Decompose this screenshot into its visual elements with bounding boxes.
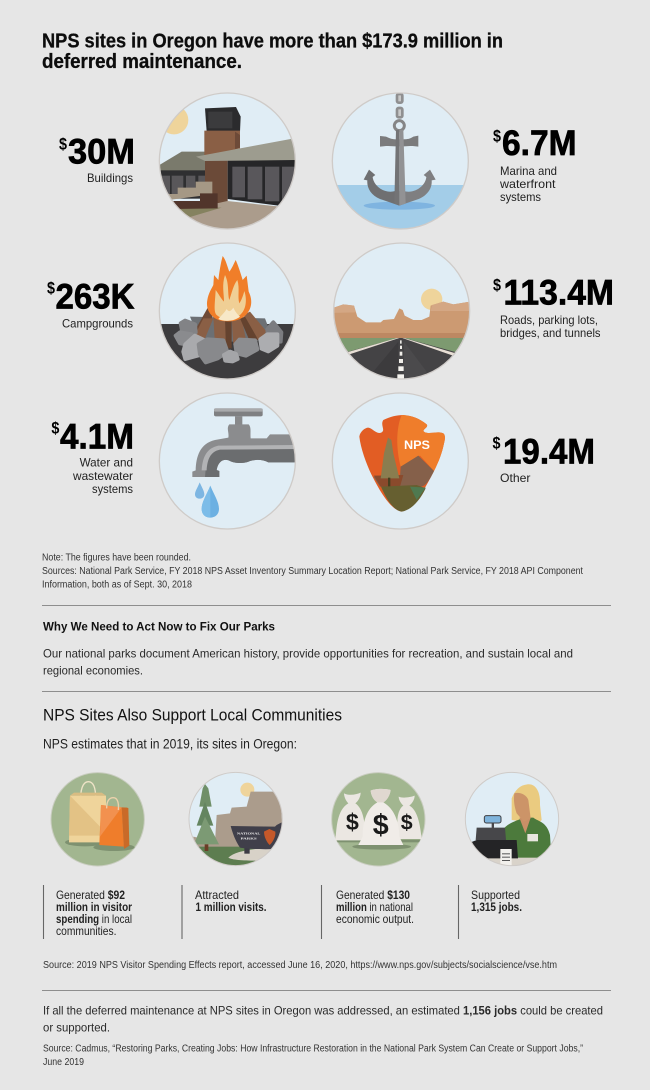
callout: jobs: [458, 885, 522, 939]
stat: buildings: [59, 132, 135, 185]
note and sources: Sources: National Park Service, FY 2018 NPS Asset Inventory Summary Location Report; National Park Service, FY 2018 API Component: [42, 566, 583, 577]
stat: water: systems: [92, 482, 133, 496]
source: visitor spending: Source: 2019 NPS Visitor Spending Effects report, accessed June 16, 2020, https://www.nps.gov/subjects/socialscience/vse.htm: [43, 960, 557, 971]
callout: economic output: economic output.: [336, 912, 414, 926]
stat: campgrounds: Campgrounds: [62, 316, 133, 330]
callout: economic output: [322, 885, 414, 939]
callout: jobs: Supported: [471, 888, 520, 902]
icon: national park sign: PARKS: [241, 837, 257, 841]
callout: visits: Attracted: [195, 888, 239, 902]
stat: roads: 113.4M: [504, 273, 614, 312]
source: Cadmus: [43, 1044, 583, 1068]
source: Cadmus: June 2019: [43, 1057, 84, 1068]
title: NPS sites in Oregon have more than $173.9 million in: [42, 30, 503, 52]
callout: economic output: Generated $130: [336, 888, 410, 902]
stat: campgrounds: [47, 277, 134, 330]
stat: other: Other: [500, 471, 530, 485]
icon: NPS arrowhead: NPS: [404, 438, 430, 452]
text: jobs estimate: [43, 1003, 603, 1035]
icon: money bags: $: [373, 809, 389, 841]
section: why we need to act: [43, 622, 573, 678]
stat: marina: Marina and: [500, 164, 557, 178]
heading: local communities: NPS Sites Also Support Local Communities: [43, 707, 342, 725]
note and sources: Information, both as of Sept. 30, 2018: [42, 580, 192, 590]
stat: marina: 6.7M: [502, 124, 576, 163]
stat: campgrounds: $: [47, 278, 55, 297]
stat: water: Water and: [80, 456, 133, 470]
stat: water: 4.1M: [60, 417, 134, 456]
subheading: NPS estimates that in 2019, its sites in Oregon:: [43, 736, 297, 752]
icon: national park sign: [187, 772, 287, 870]
icon: road: [333, 242, 470, 380]
callout: visits: [182, 885, 266, 939]
callout: visitor spending: Generated $92: [56, 888, 125, 902]
icon: money bags: [330, 773, 427, 866]
stat: other: $: [492, 433, 501, 452]
stat: other: 19.4M: [503, 432, 595, 471]
stat: marina: systems: [500, 190, 541, 204]
callout: jobs: 1,315 jobs.: [471, 900, 522, 914]
section: why we need to act: regional economies.: [43, 664, 143, 678]
icon: national park sign: NATIONAL: [237, 831, 261, 835]
title: deferred maintenance.: [42, 51, 242, 73]
callout: visitor spending: communities.: [56, 924, 116, 938]
icon: NPS arrowhead: [332, 393, 468, 529]
stat: marina: $: [493, 126, 501, 145]
stat: marina: [493, 124, 576, 204]
stat: buildings: Buildings: [87, 171, 133, 185]
callout: economic output: million in national: [336, 900, 413, 914]
callout: visitor spending: spending in local: [56, 912, 132, 926]
icon: shopping bags: [51, 773, 144, 866]
stat: roads: bridges, and tunnels: [500, 326, 600, 340]
text: jobs estimate: If all the deferred maintenance at NPS sites in Oregon was addressed, an estimated 1,156 jobs could be created: [43, 1003, 603, 1017]
stat: buildings: 30M: [68, 132, 135, 172]
stat: roads: Roads, parking lots,: [500, 313, 598, 327]
title: [42, 30, 503, 73]
stat: water: $: [51, 418, 60, 437]
source: Cadmus: Source: Cadmus, “Restoring Parks, Creating Jobs: How Infrastructure Restoration in the National Park System Can Create or Support Jobs,”: [43, 1044, 583, 1054]
icon: anchor: [332, 92, 469, 230]
text: jobs estimate: or supported.: [43, 1021, 110, 1035]
stat: roads: $: [493, 275, 501, 294]
icon: campfire: [158, 242, 296, 380]
stat: water: [51, 417, 134, 496]
stat: water: wastewater: [72, 469, 133, 483]
stat: campgrounds: 263K: [56, 277, 134, 316]
note and sources: [42, 552, 583, 590]
stat: buildings: $: [59, 134, 67, 153]
section: why we need to act: Why We Need to Act Now to Fix Our Parks: [43, 622, 275, 634]
callout: visitor spending: million in visitor: [56, 900, 132, 914]
note and sources: Note: The figures have been rounded.: [42, 552, 191, 564]
callout: visitor spending: [44, 885, 132, 939]
icon: building: [158, 92, 296, 230]
icon: faucet: [158, 392, 296, 530]
icon: cashier: [464, 772, 560, 866]
stat: marina: waterfront: [499, 177, 556, 191]
stat: roads: [493, 273, 614, 340]
stat: other: [492, 432, 595, 485]
icon: money bags: $: [346, 809, 359, 835]
icon: money bags: $: [401, 810, 413, 834]
section: why we need to act: Our national parks document American history, provide opportunities for recreation, and sustain local and: [43, 646, 573, 660]
callout: visits: 1 million visits.: [196, 900, 266, 914]
